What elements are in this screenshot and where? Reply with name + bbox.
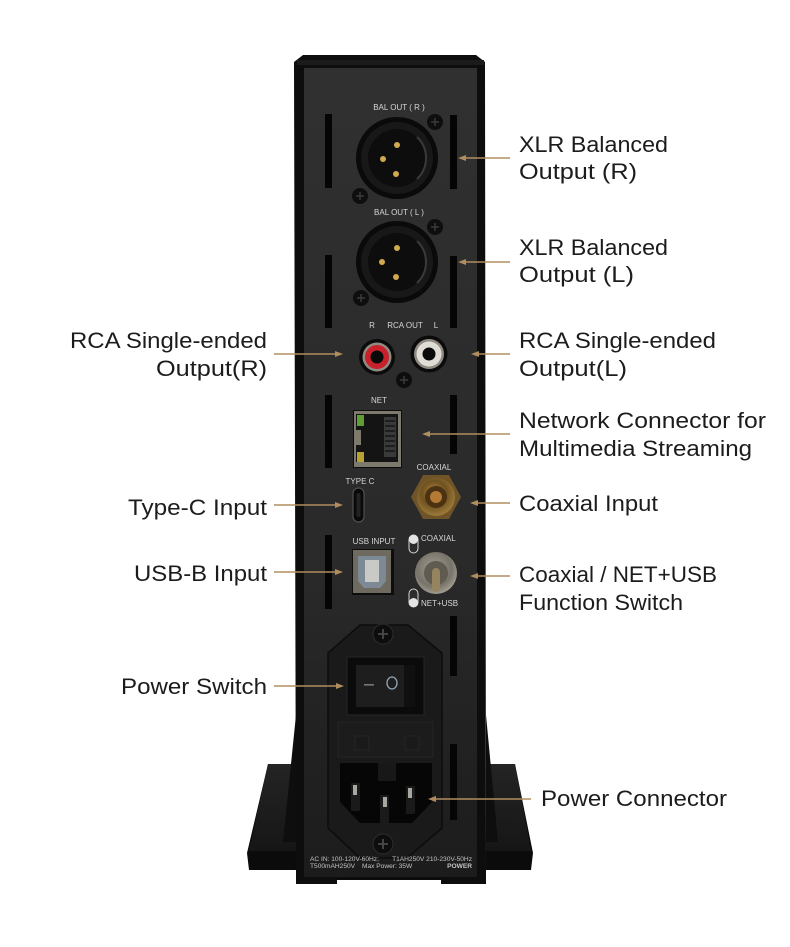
USB Type-C connector: TYPE C [346,477,375,486]
label: Coaxial / NET+USB Function Switch: Coaxial / NET+USB [519,562,717,587]
coaxial / NET+USB toggle switch: NET+USB [421,599,458,608]
label: Power Connector: Power Connector [541,786,728,811]
RCA output connectors: L [434,321,439,330]
label: RCA Single-ended Output(L): RCA Single-ended [519,328,716,353]
network RJ45 connector [353,396,402,468]
power rating text [310,856,472,870]
power rating text: POWER [447,863,472,870]
label: Coaxial Input: Coaxial Input [519,491,659,516]
label: Power Connector [428,786,728,811]
label: Network Connector: Multimedia Streaming [519,436,752,461]
coaxial input connector [411,463,461,519]
RCA output connectors [359,321,448,388]
label: RCA Single-ended Output(R) [70,328,343,381]
power switch [347,657,424,715]
power rating text: T500mAH250V [310,863,356,870]
label: Coaxial Input [470,491,659,516]
label: RCA Single-ended Output(R): RCA Single-ended [70,328,267,353]
fuse drawer [338,722,433,757]
label: XLR Balanced Output (R): XLR Balanced [519,132,668,157]
power rating text: AC IN: 100-120V-60Hz; [310,856,379,863]
label: Power Switch: Power Switch [121,674,267,699]
power rating text: Max Power: 35W [362,863,413,870]
USB-B input connector [352,537,395,595]
device stand base [247,715,533,880]
coaxial input connector: COAXIAL [417,463,452,472]
label: Coaxial / NET+USB Function Switch: Function Switch [519,590,683,615]
USB Type-C connector [346,477,375,522]
label: XLR Balanced Output (R): Output (R) [519,159,637,184]
coaxial / NET+USB toggle switch [409,534,458,608]
label: Coaxial / NET+USB Function Switch [470,562,717,615]
label: XLR Balanced Output (L) [458,235,668,287]
label: XLR Balanced Output (R) [458,132,668,184]
label: RCA Single-ended Output(R): Output(R) [156,356,267,381]
XLR balanced output L connector [353,208,443,306]
power rating text: T1AH250V 210-230V-50Hz [392,856,472,863]
label: USB-B Input [134,561,343,586]
label: RCA Single-ended Output(L) [471,328,716,381]
label: Network Connector: Network Connector for [519,408,767,433]
RCA output connectors: R [369,321,375,330]
network RJ45 connector: NET [371,396,387,405]
ventilation slots [325,114,457,820]
USB-B input connector: USB INPUT [353,537,395,546]
label: RCA Single-ended Output(L): Output(L) [519,356,627,381]
device body [294,55,486,884]
label: Type-C Input [128,495,343,520]
label: USB-B Input: USB-B Input [134,561,268,586]
RCA output connectors: RCA OUT [387,321,423,330]
label: Power Switch [121,674,344,699]
XLR balanced output R connector: BAL OUT ( R ) [373,103,425,112]
label: Network Connector [422,408,767,461]
label: Type-C Input: Type-C Input [128,495,268,520]
XLR balanced output L connector: BAL OUT ( L ) [374,208,424,217]
label: XLR Balanced Output (L): XLR Balanced [519,235,668,260]
label: XLR Balanced Output (L): Output (L) [519,262,634,287]
IEC socket [340,763,432,823]
XLR balanced output R connector [352,103,443,204]
power inlet module [328,624,442,858]
coaxial / NET+USB toggle switch: COAXIAL [421,534,456,543]
